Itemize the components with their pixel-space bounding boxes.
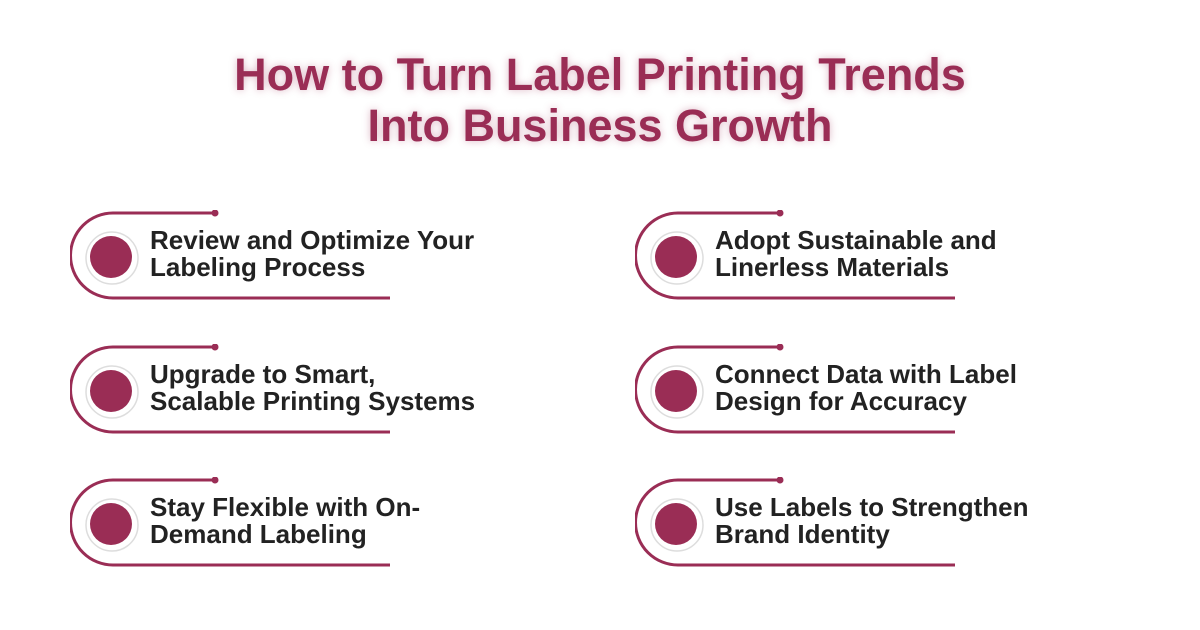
text: Brand Identity bbox=[715, 519, 890, 549]
text: Use Labels to Strengthen bbox=[715, 492, 1028, 522]
item: review bbox=[70, 210, 474, 300]
text bbox=[150, 359, 475, 416]
text: Demand Labeling bbox=[150, 519, 367, 549]
item: brand bbox=[635, 477, 1028, 566]
text bbox=[150, 225, 474, 282]
text bbox=[715, 225, 997, 282]
text: Design for Accuracy bbox=[715, 386, 967, 416]
item: upgrade bbox=[70, 344, 475, 434]
title bbox=[232, 49, 968, 151]
text bbox=[150, 492, 420, 549]
text bbox=[715, 359, 1017, 416]
title: How to Turn Label Printing Trends bbox=[234, 49, 966, 100]
text: Linerless Materials bbox=[715, 252, 949, 282]
text: Upgrade to Smart, bbox=[150, 359, 375, 389]
title: Into Business Growth bbox=[367, 100, 833, 151]
text: Stay Flexible with On- bbox=[150, 492, 420, 522]
item: flexible bbox=[70, 477, 420, 566]
item: sustainable bbox=[635, 210, 997, 300]
text: Adopt Sustainable and bbox=[715, 225, 997, 255]
item: data bbox=[635, 344, 1017, 434]
text: Labeling Process bbox=[150, 252, 365, 282]
text bbox=[715, 492, 1028, 549]
text: Review and Optimize Your bbox=[150, 225, 474, 255]
text: Connect Data with Label bbox=[715, 359, 1017, 389]
text: Scalable Printing Systems bbox=[150, 386, 475, 416]
